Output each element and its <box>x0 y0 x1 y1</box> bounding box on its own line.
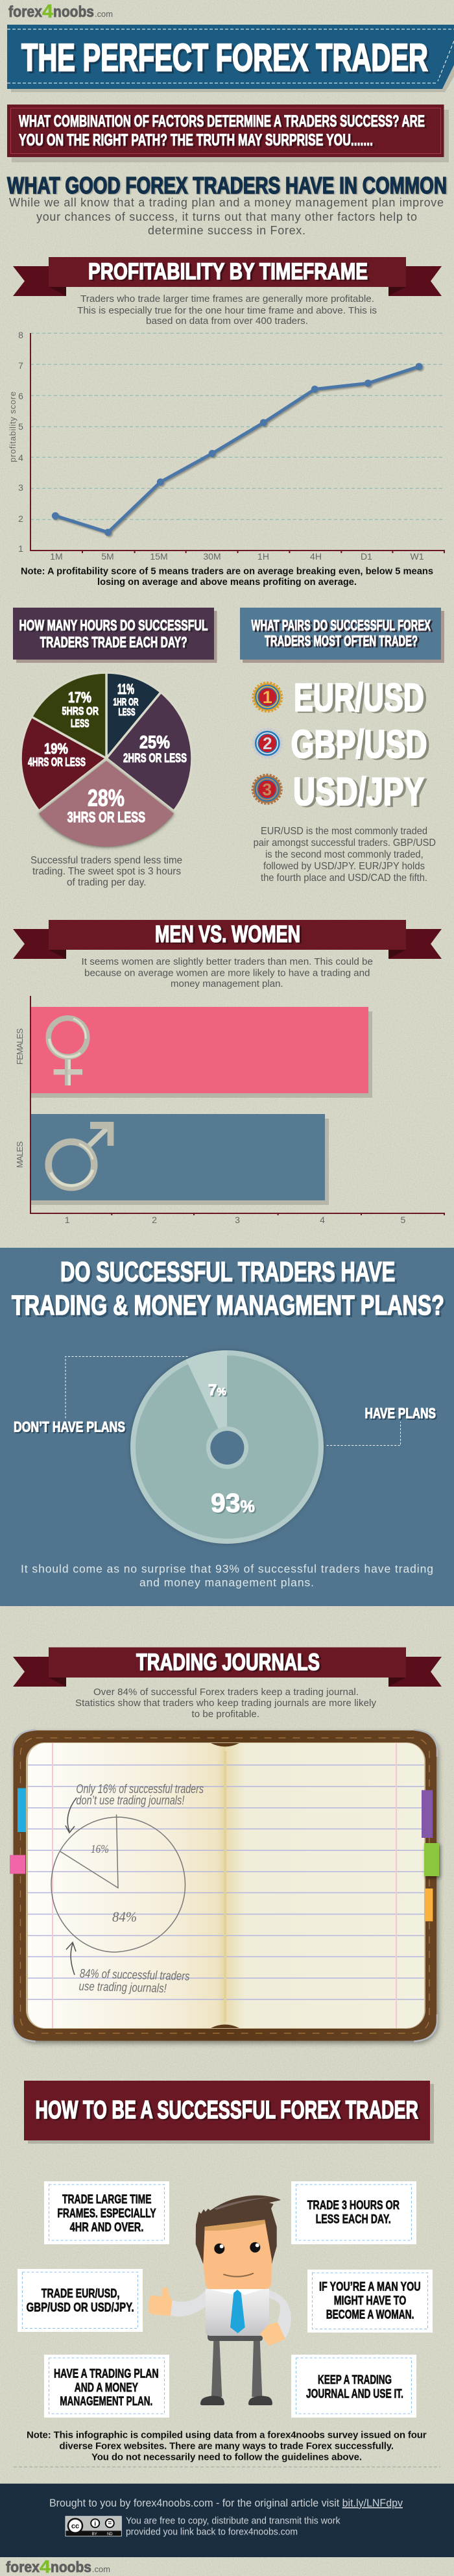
chart note: Note: A profitability score of 5 means traders are on average breaking even, below 5 means <box>21 566 433 576</box>
card: become a woman: IF YOU’RE A MAN YOU <box>319 2280 421 2294</box>
panel: intro question <box>7 105 449 162</box>
illustration: businessman <box>149 2196 291 2405</box>
men vs women text: money management plan. <box>171 978 283 989</box>
line chart: profitability score: 3 <box>18 482 23 493</box>
bar chart: men vs women: 2 <box>152 1215 157 1225</box>
sketch: top note: don’t use trading journals! <box>76 1794 185 1807</box>
line chart: profitability score <box>8 330 445 562</box>
logo: noobs <box>53 3 94 21</box>
panel: hours heading <box>13 608 217 663</box>
sketch: bottom note: 84% of successful traders <box>80 1967 190 1983</box>
card: large time frames: 4HR AND OVER. <box>70 2220 143 2235</box>
panel: how to be successful heading <box>24 2081 434 2144</box>
line chart: profitability score: 30M <box>203 551 221 562</box>
sketch: pie chart: 16% <box>91 1842 109 1855</box>
bar chart: men vs women: MALES <box>15 1141 25 1168</box>
sketch: pie chart <box>51 1814 185 1952</box>
card: large time frames: TRADE LARGE TIME <box>62 2192 152 2207</box>
journals text: Statistics show that traders who keep trading journals are more likely <box>75 1698 376 1709</box>
card: pairs: TRADE EUR/USD, <box>42 2286 119 2301</box>
intro paragraph: determine success in Forex. <box>148 224 305 237</box>
card: 3 hours <box>291 2181 416 2244</box>
sketch: bottom note <box>78 1967 190 1996</box>
panel: trading plans <box>0 1248 454 1606</box>
line chart: profitability score: 1 <box>18 543 23 554</box>
men vs women text: because on average women are more likely to have a trading and <box>84 967 370 978</box>
plans paragraph <box>21 1562 433 1589</box>
pie chart: hours traded <box>21 673 192 847</box>
donut chart <box>130 1350 324 1544</box>
icon: silver medal: 2 <box>263 734 272 753</box>
bar: females <box>31 1007 368 1093</box>
pairs paragraph: is the second most commonly traded, <box>265 849 424 860</box>
line chart: profitability score: 2 <box>18 514 23 524</box>
plans paragraph: and money management plans. <box>139 1576 314 1589</box>
callout: don't have plans: DON’T HAVE PLANS <box>14 1419 125 1435</box>
chart note <box>21 566 433 588</box>
pairs paragraph: followed by USD/JPY. EUR/JPY holds <box>263 861 425 872</box>
title banner <box>7 25 454 92</box>
callout: don't have plans <box>14 1357 188 1435</box>
pie labels: 5HRS OR <box>62 704 99 717</box>
sticky tab: purple <box>422 1790 433 1838</box>
line chart: profitability score: 5M <box>101 551 114 562</box>
card: 3 hours: TRADE 3 HOURS OR <box>307 2198 400 2212</box>
arrow: to 16% slice <box>66 1798 77 1833</box>
logo: forex <box>8 3 43 21</box>
pie labels: 11% <box>117 681 134 697</box>
heading <box>12 1257 444 1321</box>
bar chart: men vs women: FEMALES <box>15 1028 25 1065</box>
ribbon: profitability by timeframe <box>13 257 442 296</box>
pie labels: LESS <box>118 707 135 718</box>
callout: have plans <box>327 1405 436 1445</box>
note <box>27 2429 427 2463</box>
ribbon: profitability by timeframe: PROFITABILITY BY TIMEFRAME <box>88 259 368 284</box>
icon: silver medal <box>254 730 281 757</box>
profitability text <box>77 293 377 327</box>
icon: creative commons badge <box>66 2516 121 2536</box>
card: pairs <box>18 2269 143 2332</box>
card: become a woman: BECOME A WOMAN. <box>326 2307 414 2322</box>
donut chart: 7% <box>208 1381 226 1399</box>
panel: pairs heading <box>240 608 444 663</box>
card: become a woman <box>307 2270 433 2333</box>
logo: .com <box>95 9 113 19</box>
hours caption <box>30 855 182 888</box>
bar chart: men vs women: 3 <box>235 1215 240 1225</box>
panel: hours heading: TRADERS TRADE EACH DAY? <box>40 634 187 650</box>
bar chart: men vs women: 1 <box>65 1215 70 1225</box>
donut chart: 93% <box>211 1488 255 1518</box>
note: diverse Forex websites. There are many ways to trade Forex successfully. <box>60 2441 394 2451</box>
pairs paragraph: the fourth place and USD/CAD the fifth. <box>261 873 427 884</box>
pie labels: 19% <box>44 740 68 757</box>
ribbon: men vs women <box>13 920 442 959</box>
line chart: profitability score: 5 <box>18 421 23 432</box>
pairs paragraph: pair amongst successful traders. GBP/USD <box>254 837 436 848</box>
icon: creative commons badge: i <box>94 2520 96 2528</box>
card: pairs: GBP/USD OR USD/JPY. <box>27 2300 134 2314</box>
icon: creative commons badge: BY <box>92 2533 97 2536</box>
bar chart: men vs women <box>15 996 445 1225</box>
icon: creative commons badge: ND <box>107 2533 113 2536</box>
line chart: profitability score: 7 <box>18 360 23 371</box>
sketch: pie chart: 84% <box>112 1909 137 1925</box>
hours caption: trading. The sweet spot is 3 hours <box>32 866 181 877</box>
card: trading plan: AND A MONEY <box>75 2381 138 2395</box>
icon: gold medal: 1 <box>263 687 272 707</box>
line chart: profitability score: profitability score <box>8 391 18 462</box>
footer logo: forex <box>6 2558 40 2575</box>
illustration: notebook <box>10 1729 439 2041</box>
ribbon: men vs women: MEN VS. WOMEN <box>155 921 300 947</box>
footer logo: noobs <box>51 2558 91 2575</box>
men vs women text <box>82 956 373 989</box>
profitability text: Traders who trade larger time frames are generally more profitable. <box>80 293 374 304</box>
icon: gold medal <box>254 683 281 711</box>
sticky tab: blue <box>18 1788 26 1832</box>
line chart: profitability score: 15M <box>150 551 168 562</box>
card: trading plan: MANAGEMENT PLAN. <box>60 2394 152 2409</box>
hours caption: Successful traders spend less time <box>30 855 182 866</box>
note: Note: This infographic is compiled using data from a forex4noobs survey issued on four <box>27 2429 427 2440</box>
pairs paragraph: EUR/USD is the most commonly traded <box>261 826 427 837</box>
card: trading journal <box>291 2355 416 2418</box>
card: large time frames <box>44 2181 169 2244</box>
line chart: profitability score: D1 <box>361 551 372 562</box>
icon: creative commons badge: cc <box>71 2523 79 2531</box>
pie labels: 17% <box>68 689 91 706</box>
profitability text: based on data from over 400 traders. <box>146 316 308 327</box>
pie labels <box>28 681 187 826</box>
bar chart: men vs women: 4 <box>320 1215 325 1225</box>
pie labels: 25% <box>139 732 170 752</box>
icon: female symbol <box>49 1018 87 1085</box>
panel: hours heading: HOW MANY HOURS DO SUCCESSFUL <box>19 617 208 634</box>
sketch: bottom note: use trading journals! <box>78 1980 167 1996</box>
pairs paragraph <box>254 826 436 884</box>
journals text: Over 84% of successful Forex traders keep a trading journal. <box>93 1687 359 1698</box>
sketch: top note <box>76 1783 204 1807</box>
pie labels: LESS <box>71 717 90 730</box>
note: You do not necessarily need to follow the guidelines above. <box>91 2451 362 2463</box>
footer <box>0 2484 454 2557</box>
pie labels: 28% <box>88 784 125 811</box>
line chart: profitability score: 4 <box>18 452 23 463</box>
footer logo: .com <box>92 2564 110 2574</box>
bar chart: men vs women: 5 <box>401 1215 406 1225</box>
icon: male symbol <box>49 1122 114 1187</box>
intro paragraph: While we all know that a trading plan and a money management plan improve <box>9 196 444 209</box>
card: trading plan: HAVE A TRADING PLAN <box>54 2366 159 2381</box>
pie labels: 2HRS OR LESS <box>123 751 187 765</box>
line chart: profitability score: 1H <box>257 551 269 562</box>
pie labels: 3HRS OR LESS <box>67 809 145 826</box>
card: become a woman: MIGHT HAVE TO <box>334 2294 406 2308</box>
pie labels: 4HRS OR LESS <box>28 756 86 769</box>
ribbon: trading journals <box>13 1648 442 1687</box>
hours caption: of trading per day. <box>67 877 147 888</box>
footer: Brought to you by forex4noobs.com - for the original article visit bit.ly/LNFdpv <box>49 2497 403 2509</box>
card: trading journal: JOURNAL AND USE IT. <box>306 2387 403 2401</box>
notebook cover <box>13 1731 436 2041</box>
ribbon: trading journals: TRADING JOURNALS <box>136 1649 320 1676</box>
line chart: profitability score: 1M <box>50 551 63 562</box>
card: trading plan <box>44 2355 169 2418</box>
footer: provided you link back to forex4noobs.com <box>126 2527 298 2538</box>
footer logo <box>6 2557 110 2576</box>
logo <box>8 1 113 22</box>
sticky tab: green <box>424 1843 439 1876</box>
intro paragraph <box>9 196 444 237</box>
sketch: top note: Only 16% of successful traders <box>76 1783 204 1796</box>
bar: males <box>31 1114 325 1200</box>
icon: bronze medal <box>253 775 281 803</box>
sticky tab: orange <box>425 1889 433 1922</box>
journals text: to be profitable. <box>192 1709 259 1720</box>
line chart: profitability score: 6 <box>18 391 23 401</box>
chart note: losing on average and above means profiting on average. <box>97 576 357 588</box>
line chart: profitability score: W1 <box>410 551 424 562</box>
pie labels: 1HR OR <box>113 697 139 708</box>
sticky tab: pink <box>10 1855 25 1874</box>
icon: bronze medal: 3 <box>262 780 272 799</box>
men vs women text: It seems women are slightly better traders than men. This could be <box>82 956 373 967</box>
icon: creative commons badge: = <box>108 2520 112 2527</box>
line chart: profitability score: 4H <box>310 551 322 562</box>
journals text <box>75 1687 376 1720</box>
logo: 4 <box>42 1 53 22</box>
intro paragraph: your chances of success, it turns out that many other factors help to <box>36 210 417 223</box>
arrow: to 84% slice <box>66 1942 76 1975</box>
profitability text: This is especially true for the one hour time frame and above. This is <box>77 305 377 316</box>
card: 3 hours: LESS EACH DAY. <box>316 2212 391 2227</box>
card: large time frames: FRAMES. ESPECIALLY <box>57 2207 156 2221</box>
footer: You are free to copy, distribute and transmit this work <box>126 2515 340 2527</box>
plans paragraph: It should come as no surprise that 93% of successful traders have trading <box>21 1562 433 1575</box>
card: trading journal: KEEP A TRADING <box>318 2373 392 2387</box>
line chart: profitability score: 8 <box>18 330 23 340</box>
